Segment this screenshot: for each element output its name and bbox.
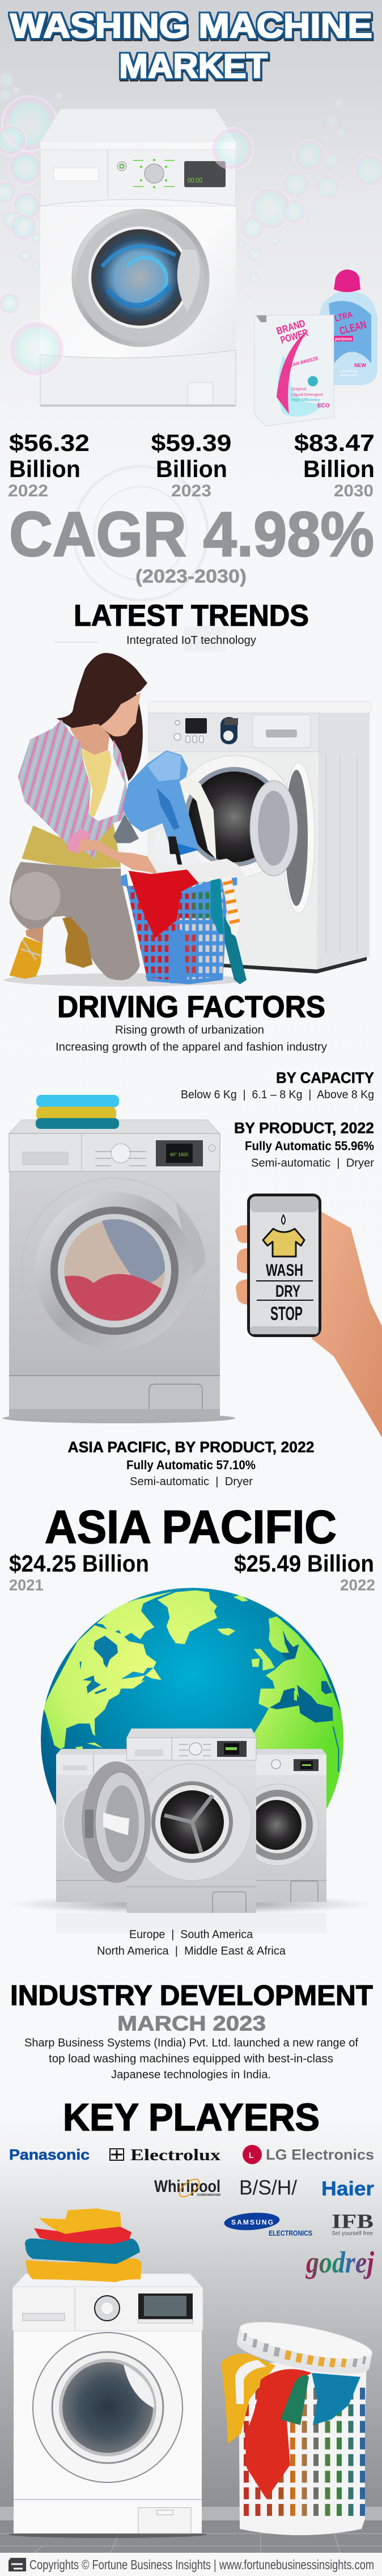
neck and chest bbox=[70, 724, 109, 755]
detergent box: OCEAN BREEZE bbox=[283, 356, 320, 370]
red cloth bbox=[129, 870, 198, 938]
basket bbox=[127, 882, 227, 980]
hamper clothes bbox=[221, 2354, 275, 2444]
Baltic Sea bbox=[281, 1630, 299, 1660]
hand bbox=[132, 853, 158, 874]
Asia Pacific value 2021: $24.25 Billion bbox=[9, 1550, 149, 1577]
other sleeve bbox=[113, 815, 139, 843]
other regions: North America | Middle East & Africa bbox=[97, 1945, 286, 1957]
Hudson Bay bbox=[94, 1635, 118, 1668]
industry development: MARCH 2023 bbox=[117, 2012, 266, 2035]
market value 2022 bbox=[8, 429, 90, 500]
Baja coast and Red Sea bbox=[46, 1721, 338, 1772]
hamper lid bbox=[234, 2314, 375, 2381]
woman with laundry basket bbox=[4, 653, 255, 986]
other regions: Europe | South America bbox=[129, 1929, 253, 1941]
logo: Whirlpool: CORPORATION bbox=[197, 2194, 220, 2197]
latest trends heading: Integrated IoT technology bbox=[126, 634, 256, 647]
Gulf of St Lawrence bbox=[121, 1668, 154, 1679]
hair bbox=[57, 653, 147, 781]
water drop bbox=[282, 1215, 285, 1224]
faint washer reflection bbox=[54, 466, 226, 652]
key players heading: KEY PLAYERS bbox=[63, 2096, 320, 2139]
by capacity: Below 6 Kg | 6.1 – 8 Kg | Above 8 Kg bbox=[181, 1089, 374, 1101]
soap bubbles left bbox=[0, 73, 62, 314]
logo: Panasonic: Panasonic bbox=[9, 2146, 90, 2163]
detergent bottle: super formula bbox=[340, 370, 358, 373]
Asia Pacific value 2022 bbox=[234, 1550, 375, 1594]
logo: Haier: Haier bbox=[321, 2178, 374, 2200]
by product 2022: Fully Automatic 55.96% bbox=[245, 1139, 374, 1153]
Asia Pacific by product: Fully Automatic 57.10% bbox=[126, 1458, 256, 1472]
stacked towels bbox=[36, 1095, 119, 1129]
logo: Samsung bbox=[224, 2211, 312, 2237]
detergent bottle bbox=[318, 269, 377, 385]
open door bbox=[82, 1761, 151, 1883]
logo: IFB bbox=[332, 2210, 373, 2237]
pile of clothes on washer bbox=[25, 2208, 142, 2282]
detergent bottle: NEW bbox=[354, 362, 367, 368]
detergent box: ECO bbox=[317, 403, 330, 409]
arm bbox=[78, 838, 158, 874]
three washing machines bbox=[9, 1728, 373, 1933]
industry development: Japanese technologies in India. bbox=[111, 2068, 271, 2081]
detergent box: Original bbox=[291, 387, 307, 391]
right washer bbox=[237, 1749, 326, 1902]
industry development: Sharp Business Systems (India) Pvt. Ltd. launched a new range of bbox=[24, 2037, 358, 2049]
washing machine 1: 00:00 bbox=[188, 176, 202, 184]
market value 2030: 2030 bbox=[334, 482, 373, 500]
industry development: INDUSTRY DEVELOPMENT bbox=[10, 1980, 373, 2012]
washer reflection bbox=[56, 1913, 326, 1933]
Asia Pacific value 2022: $25.49 Billion bbox=[234, 1550, 374, 1577]
yellow top bbox=[80, 748, 112, 817]
bubble bottom left bbox=[8, 321, 65, 377]
logo: Whirlpool bbox=[154, 2176, 220, 2200]
white laundry bbox=[151, 828, 202, 865]
washing machine 4 bbox=[9, 2274, 207, 2538]
front shoe bbox=[10, 937, 43, 979]
logo: IFB: Set yourself free bbox=[332, 2230, 373, 2237]
baseboard and floor bbox=[0, 2507, 382, 2553]
market value 2023: Billion bbox=[156, 456, 227, 482]
hand holding phone: DRY bbox=[275, 1282, 300, 1301]
Black Sea bbox=[321, 1681, 333, 1694]
detergent bottle: fresh&organic bbox=[340, 374, 358, 377]
logo: LG Electronics: LG Electronics bbox=[266, 2146, 374, 2163]
title: MARKET bbox=[119, 47, 268, 85]
detergent bottle: purpose bbox=[335, 336, 353, 342]
fortune business insights icon bbox=[9, 2558, 26, 2571]
market value 2030: $83.47 bbox=[294, 429, 375, 456]
title: WASHING MACHINE bbox=[10, 7, 372, 45]
logo: IFB: IFB bbox=[332, 2210, 373, 2233]
strap bbox=[168, 837, 183, 870]
Asia Pacific by product: ASIA PACIFIC, BY PRODUCT, 2022 bbox=[68, 1439, 314, 1456]
logo: LG Electronics bbox=[243, 2145, 374, 2164]
rear shoe bbox=[62, 917, 92, 968]
globe bbox=[41, 1588, 343, 1809]
face bbox=[100, 692, 141, 736]
detergent box: Liquid Detergent bbox=[291, 393, 323, 397]
blue blouse bbox=[123, 751, 200, 855]
laundry pile bbox=[157, 858, 255, 948]
logo: Whirlpool: Whirlpool bbox=[154, 2177, 220, 2196]
by product 2022 bbox=[234, 1120, 374, 1170]
lower top bbox=[22, 823, 121, 868]
market value 2030: Billion bbox=[303, 456, 375, 482]
market value 2030 bbox=[294, 429, 375, 500]
detergent box: BRAND bbox=[275, 317, 307, 337]
logo: Samsung: ELECTRONICS bbox=[269, 2229, 312, 2237]
striped shirt bbox=[18, 719, 130, 858]
Asia Pacific heading: ASIA PACIFIC bbox=[45, 1500, 337, 1553]
trousers bbox=[10, 862, 140, 980]
logo: BSH: B/S/H/ bbox=[239, 2176, 297, 2199]
logo: Samsung: SAMSUNG bbox=[231, 2218, 273, 2226]
Asia Pacific value 2022: 2022 bbox=[340, 1576, 375, 1594]
detergent bottle: CLEAN bbox=[338, 319, 368, 338]
soap bubbles right bbox=[236, 99, 382, 298]
market value 2023 bbox=[151, 429, 231, 500]
ankle bbox=[26, 927, 44, 943]
Asia Pacific by product bbox=[68, 1439, 314, 1488]
shirt icon bbox=[263, 1229, 304, 1257]
detergent bottle: LTRA bbox=[334, 310, 354, 324]
latest trends heading: LATEST TRENDS bbox=[74, 599, 309, 633]
washing machine 1 bbox=[40, 109, 236, 407]
by capacity bbox=[181, 1069, 374, 1101]
washing machine 3: 60° 1600 bbox=[170, 1152, 189, 1157]
logo: LG Electronics: L bbox=[249, 2151, 254, 2160]
CAGR: CAGR 4.98% bbox=[9, 499, 374, 570]
hand holding phone: STOP bbox=[270, 1303, 303, 1325]
hand holding phone bbox=[235, 1194, 382, 1437]
teal sock bbox=[224, 916, 247, 984]
bubble on washer bbox=[211, 127, 254, 170]
industry development: top load washing machines equipped with best-in-class bbox=[49, 2052, 333, 2065]
driving factors heading: Rising growth of urbanization bbox=[115, 1024, 264, 1036]
other regions bbox=[97, 1929, 286, 1957]
by capacity: BY CAPACITY bbox=[276, 1069, 374, 1086]
left washer bbox=[56, 1749, 143, 1902]
logo: Electrolux bbox=[110, 2146, 221, 2164]
driving factors heading: DRIVING FACTORS bbox=[57, 990, 325, 1024]
detergent box bbox=[254, 315, 334, 426]
Asia Pacific value 2021: 2021 bbox=[9, 1576, 43, 1594]
CAGR: (2023-2030) bbox=[135, 566, 247, 587]
by product 2022: BY PRODUCT, 2022 bbox=[234, 1120, 374, 1137]
industry development bbox=[10, 1980, 373, 2081]
market value 2022: $56.32 bbox=[9, 429, 90, 456]
washing machine 2 bbox=[146, 702, 371, 973]
by product 2022: Semi-automatic | Dryer bbox=[251, 1157, 374, 1170]
latest trends heading bbox=[74, 599, 309, 647]
orange sock bbox=[221, 878, 240, 937]
market value 2023: 2023 bbox=[171, 482, 211, 500]
footer strip bbox=[0, 2553, 382, 2576]
market value 2023: $59.39 bbox=[151, 429, 231, 456]
market value 2022: 2022 bbox=[8, 482, 48, 500]
market value 2022: Billion bbox=[9, 456, 80, 482]
logo: Electrolux: Electrolux bbox=[130, 2146, 221, 2164]
detergent box: High-Efficiency bbox=[291, 398, 320, 402]
Asia Pacific by product: Semi-automatic | Dryer bbox=[130, 1475, 253, 1488]
center washer bbox=[127, 1728, 256, 1913]
laundry hamper bbox=[221, 2314, 375, 2535]
hand holding phone: WASH bbox=[266, 1261, 303, 1280]
Italy bbox=[294, 1690, 297, 1701]
detergent box: POWER bbox=[279, 327, 309, 346]
washing machine 3 bbox=[3, 1120, 235, 1423]
Great Lakes bbox=[79, 1661, 107, 1694]
driving factors heading: Increasing growth of the apparel and fashion industry bbox=[56, 1041, 327, 1053]
Asia Pacific value 2021 bbox=[9, 1550, 149, 1594]
Mediterranean Sea bbox=[270, 1685, 333, 1723]
title bbox=[10, 7, 372, 85]
driving factors heading bbox=[56, 990, 327, 1053]
